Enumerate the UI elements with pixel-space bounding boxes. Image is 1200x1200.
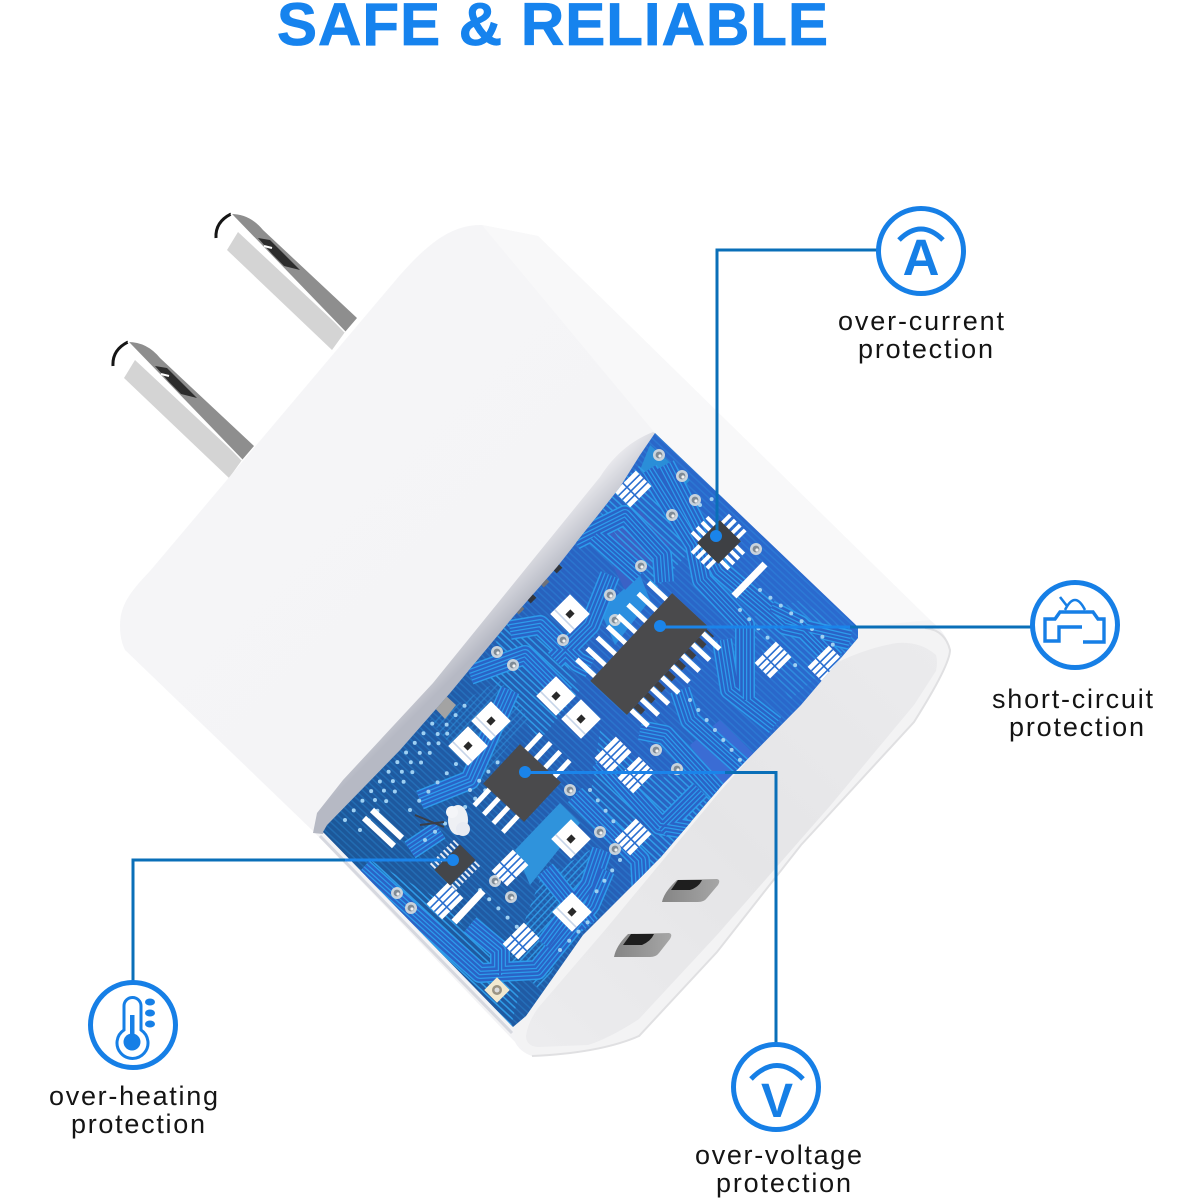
label: over-current protection: protection (858, 334, 993, 364)
white pads (448, 594, 601, 932)
icon: ampere: A (903, 229, 939, 286)
label: over-voltage protection: protection (716, 1168, 851, 1198)
copper fill patches (515, 445, 755, 885)
callout: over-voltage (519, 766, 862, 1198)
label: over-heating protection: protection (71, 1109, 205, 1139)
corner mounting pad (484, 977, 510, 1003)
leader line: over-voltage (725, 772, 776, 1044)
leader line: over-heating (133, 860, 345, 982)
base trace texture (320, 430, 870, 1030)
inner wall of cut-away (313, 432, 655, 834)
USB-C port: lower (614, 933, 671, 957)
icon: voltage: V (761, 1075, 793, 1128)
USB-C port: upper (662, 879, 719, 902)
label: over-current protection: over-current (838, 306, 1004, 336)
label: short-circuit protection: protection (1009, 712, 1144, 742)
small vias (345, 490, 840, 950)
icon: short circuit (1032, 582, 1118, 668)
label: short-circuit protection (992, 684, 1153, 742)
anchor dot: over-current (710, 530, 722, 542)
small top chip (690, 513, 748, 571)
silver vias (391, 449, 762, 914)
callout: over-heating (49, 854, 459, 1139)
bright leader segment over board: over-heating (345, 858, 453, 862)
label: over-heating protection: over-heating (49, 1081, 218, 1111)
resistor blocks (427, 471, 844, 959)
callout: over-current (710, 208, 1004, 542)
icon: voltage (734, 1044, 818, 1130)
prong: upper (215, 214, 357, 350)
charger body (120, 225, 950, 1056)
icon: ampere (878, 208, 964, 294)
large chip (582, 585, 717, 722)
right side band of body (482, 225, 930, 627)
end face panel (526, 643, 937, 1047)
leader line: short-circuit (660, 626, 1032, 628)
anchor dot: over-heating (447, 854, 459, 866)
bright leader segment over board: over-voltage (525, 771, 725, 774)
label: over-voltage protection: over-voltage (695, 1140, 862, 1170)
callout: short-circuit (654, 582, 1153, 742)
end face outer edge (532, 628, 950, 1056)
label: over-heating protection (49, 1081, 218, 1139)
label: over-voltage protection (695, 1140, 862, 1198)
charger illustration (112, 214, 950, 1056)
lower edge of cut-away (320, 836, 512, 1033)
white solder blob (415, 805, 470, 836)
label: over-current protection (838, 306, 1004, 364)
prong: lower (112, 342, 254, 478)
icon: thermometer (90, 982, 176, 1068)
end face rim (513, 628, 950, 1056)
anchor dot: over-voltage (519, 766, 531, 778)
leader line: over-current (717, 250, 878, 536)
circuit board (320, 430, 870, 1030)
middle chip (476, 737, 568, 829)
side notch components (433, 561, 562, 719)
lower-left chip (432, 842, 478, 888)
long white strips (364, 564, 765, 922)
parallel trace buses (363, 465, 850, 975)
trace hatching (370, 465, 860, 1030)
bright leader segment over board: short-circuit (660, 626, 850, 628)
label: short-circuit protection: short-circuit (992, 684, 1153, 714)
anchor dot: short-circuit (654, 620, 666, 632)
